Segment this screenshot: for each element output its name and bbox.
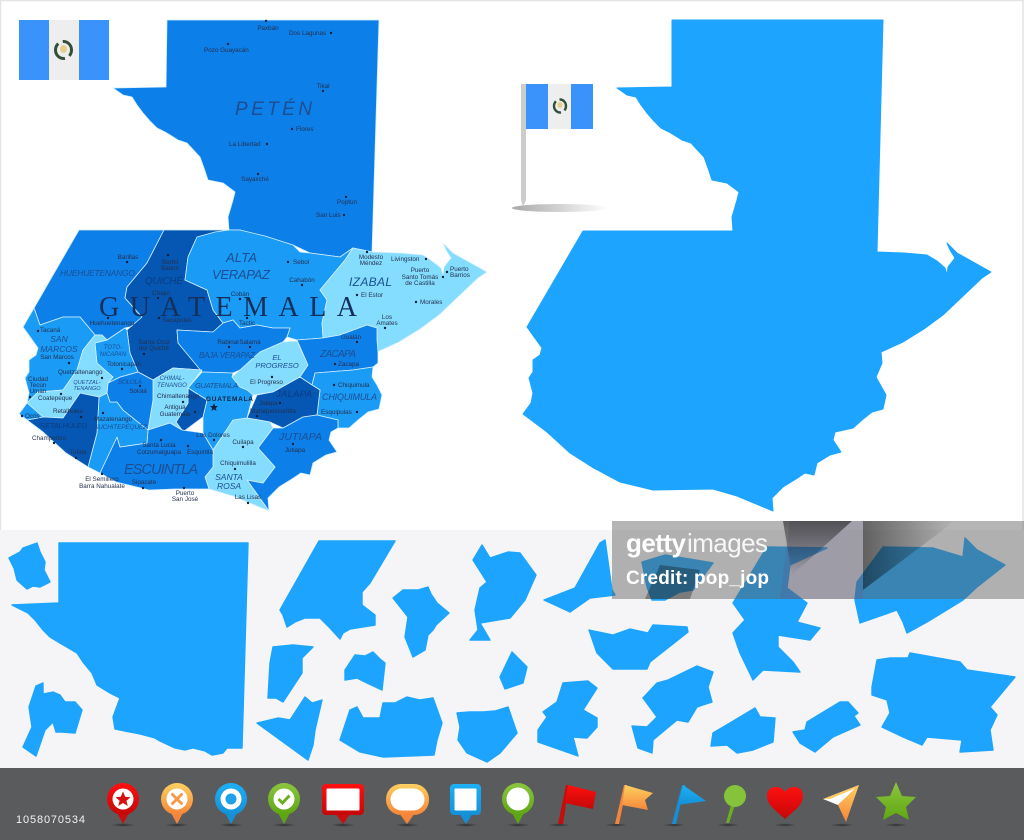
region: San Marcos	[23, 308, 95, 403]
city labels	[25, 25, 470, 503]
shape: Quiche	[470, 545, 536, 640]
city labels: Chimaltenango	[157, 393, 200, 400]
shape: Chimaltenango strip	[500, 652, 527, 689]
city labels: Los Dolores	[196, 432, 230, 439]
region: Izabal	[320, 243, 487, 352]
city labels: Sipacate	[132, 479, 157, 486]
city labels: Esquipulas	[321, 409, 352, 416]
icon: blue dot pin	[215, 783, 247, 827]
city dots	[21, 20, 448, 504]
city labels: San Marcos	[40, 354, 74, 361]
watermark text: getty	[626, 528, 687, 558]
region: Peten	[113, 20, 379, 257]
watermark text: images	[687, 528, 768, 558]
region: Solola	[107, 372, 153, 430]
region: Suchitepequez	[88, 393, 148, 473]
city labels: Gualán	[341, 334, 362, 341]
city labels: Chiquimula	[338, 382, 370, 389]
watermark text	[626, 528, 769, 589]
shape: Huehuetenango	[280, 541, 395, 639]
city labels: Tacaná	[40, 327, 61, 334]
shape: Retalhuleu	[23, 683, 82, 756]
department names: ROSA	[217, 481, 241, 491]
city labels: Tikal	[316, 83, 330, 90]
city labels: Tulate	[69, 449, 87, 456]
region: Baja Verapaz	[177, 320, 290, 373]
city labels: Salamá	[239, 339, 261, 346]
department names: MARCOS	[40, 344, 78, 354]
department names: EL	[272, 353, 282, 362]
city labels: Coatepeque	[38, 395, 73, 402]
city labels: Barbil	[162, 259, 178, 266]
city labels: Chajul	[152, 290, 170, 297]
city labels: La Libertad	[229, 141, 261, 148]
city labels: Santa Cruz	[138, 339, 170, 346]
shape: Chiquimula	[711, 708, 775, 753]
icon: green ring pin	[502, 783, 534, 827]
city labels: Flores	[296, 126, 314, 133]
image id: 1058070534	[16, 814, 85, 826]
shape: Jalapa	[538, 681, 597, 756]
map regions	[19, 20, 487, 511]
city labels: Mataquescuintla	[250, 408, 296, 415]
city labels: Chiquimulilla	[220, 460, 256, 467]
department names: SAN	[50, 334, 69, 344]
city labels: Dos Lagunas	[289, 30, 326, 37]
department names: GUATEMALA	[195, 381, 238, 390]
flag of Guatemala, top left	[19, 20, 109, 80]
region: Jutiapa	[247, 415, 338, 511]
icon: green check pin	[268, 783, 300, 827]
city labels: Champerico	[32, 435, 66, 442]
department names: CHIQUIMULA	[322, 392, 377, 402]
icon: red flag	[548, 785, 596, 827]
icon: orange rounded callout	[386, 784, 429, 827]
shape: Solola	[457, 707, 517, 762]
icon: orange navigation arrow	[823, 785, 859, 827]
shape: Escuintla	[340, 697, 442, 757]
region: Chiquimula	[312, 367, 382, 428]
region: Alta Verapaz	[185, 230, 353, 340]
city labels: Las Lisas	[235, 494, 261, 501]
city labels: Méndez	[360, 260, 382, 267]
region: Jalapa	[247, 377, 320, 428]
city labels: Barillas	[118, 254, 138, 261]
department names: BAJA VERAPAZ	[199, 351, 256, 360]
shape: Zacapa lower	[632, 666, 713, 753]
icon: blue flag	[663, 785, 706, 827]
region: Ocos coast	[19, 403, 43, 420]
department names: JALAPA	[275, 389, 312, 400]
city labels: El Progreso	[250, 379, 283, 386]
region: Zacapa	[297, 325, 378, 385]
city labels: Los	[382, 314, 392, 321]
region: Escuintla	[100, 423, 213, 490]
panel: regional map of Guatemala	[19, 20, 487, 511]
department names: ESCUINTLA	[124, 462, 198, 478]
shape: Jutiapa large	[872, 653, 1015, 752]
city labels: Jutiapa	[285, 447, 306, 454]
city labels: Poptún	[337, 199, 357, 206]
department names: JUTIAPA	[278, 431, 322, 443]
department names: TOTO-	[104, 345, 122, 351]
panel: dark icon bar	[0, 768, 1024, 840]
flag on pin	[512, 84, 608, 212]
city labels: Zacapa	[338, 361, 360, 368]
city labels: Livingston	[391, 256, 420, 263]
city labels: GUATEMALA	[206, 396, 253, 403]
city labels: Jalapa	[259, 400, 278, 407]
city labels: Guatemala	[160, 411, 191, 418]
region: Retalhuleu	[27, 393, 99, 467]
city labels: El Semillero	[85, 476, 119, 483]
city labels: Ocós	[25, 413, 40, 420]
city labels: Puerto	[411, 267, 430, 274]
department names: SUCHITEPÉQUEZ	[94, 422, 148, 431]
department names: ZACAPA	[319, 349, 356, 360]
shape: Izabal under watermark	[855, 538, 1005, 633]
department names: CHIMAL-	[160, 376, 184, 382]
city labels: Ciudad	[28, 376, 48, 383]
city labels: Quetzaltenango	[58, 369, 103, 376]
city labels: Sacapulas	[162, 317, 192, 324]
department names: QUETZAL-	[73, 380, 101, 386]
region: Sacatepequez	[176, 388, 207, 432]
city labels: Huehuetenango	[90, 320, 135, 327]
capital star marker	[210, 403, 218, 411]
region: Totonicapan	[95, 328, 138, 383]
city labels: El Estor	[361, 292, 383, 299]
department names: ALTA	[225, 250, 257, 265]
city labels: San José	[172, 496, 199, 503]
department names: HUEHUETENANGO	[60, 268, 135, 278]
department names: VERAPAZ	[212, 267, 271, 282]
city labels: Pozo Guayacán	[204, 47, 249, 54]
shape: Baja Verapaz lower	[589, 625, 688, 669]
region: Quiche	[125, 230, 229, 380]
map title: GUATEMALA	[99, 292, 358, 323]
city labels: Cahabón	[289, 277, 315, 284]
city labels: Modesto	[359, 254, 384, 261]
shape: Zacapa centre	[733, 547, 827, 680]
city labels: Tecún	[30, 382, 47, 389]
shape: Alta Verapaz under watermark	[544, 540, 615, 612]
city labels: Tactic	[239, 320, 255, 327]
department names: SOLOLÁ	[118, 377, 143, 386]
city labels: Umán	[30, 388, 47, 395]
icon: orange flag	[605, 785, 653, 827]
watermark	[612, 521, 1024, 599]
department names: TENANGO	[157, 383, 187, 389]
icon: orange cross pin	[161, 783, 193, 827]
icon: red rectangle callout	[322, 784, 364, 827]
panel: separated departments background	[0, 530, 1024, 768]
department names: IZABAL	[349, 275, 392, 289]
shape: Sacatepequez	[9, 543, 50, 589]
city labels: Paxbán	[257, 25, 279, 32]
shape: San Marcos	[393, 587, 449, 657]
city labels: Balam	[161, 265, 179, 272]
watermark text: Credit: pop_jop	[626, 568, 769, 589]
shape: Santa Rosa	[793, 702, 860, 752]
region: Chimaltenango	[148, 368, 202, 430]
frame edges	[0, 0, 1024, 530]
city labels: Sebol	[293, 259, 309, 266]
city labels: Sayaxché	[241, 176, 269, 183]
city labels: Barra Nahualate	[79, 483, 125, 490]
shape: Quetzaltenango	[268, 645, 313, 702]
department names: PETÉN	[235, 99, 312, 120]
panel: separated departments	[9, 538, 1015, 762]
department names: NICAPAN	[100, 352, 127, 358]
city labels: Esquintla	[187, 449, 213, 456]
department names	[40, 99, 392, 491]
city labels: Amates	[376, 320, 398, 327]
city labels: Totonicapán	[107, 361, 141, 368]
city labels: Santo Tomás	[402, 274, 438, 281]
city labels: Sololá	[129, 388, 147, 395]
department names: QUICHÉ	[145, 274, 183, 287]
department names: PROGRESO	[255, 361, 299, 370]
region: Guatemala department	[188, 372, 253, 450]
icon: red star pin	[107, 783, 139, 827]
city labels: Mazatenango	[94, 416, 133, 423]
region: El Progreso	[232, 341, 308, 395]
city labels: Morales	[420, 299, 442, 306]
department names: TENANGO	[73, 386, 101, 392]
icon: blue square callout	[450, 784, 481, 827]
shape: Peten	[12, 543, 248, 755]
city labels: Barrios	[450, 272, 470, 279]
shape: Totonicapan	[345, 652, 385, 690]
city labels: Cuilapa	[232, 439, 254, 446]
city labels: Antigua	[164, 404, 186, 411]
department names: SANTA	[215, 472, 243, 482]
region: Quetzaltenango	[27, 335, 113, 418]
department names: RETALHULEU	[40, 421, 88, 430]
icon: red heart	[767, 787, 803, 827]
city labels: Cotzumalguapa	[137, 449, 182, 456]
icon: green star	[876, 782, 916, 827]
city labels: Santa Lucia	[142, 442, 176, 449]
city labels: de Castilla	[405, 280, 435, 287]
city labels: Puerto	[450, 266, 469, 273]
shape: Suchitepequez	[257, 697, 322, 760]
city labels: del Quiché	[139, 345, 170, 352]
city labels: Rabinal	[217, 339, 239, 346]
city labels: Puerto	[176, 490, 195, 497]
city labels: San Luis	[316, 212, 341, 219]
shape: Baja Verapaz under watermark	[642, 555, 713, 600]
region: Santa Rosa	[205, 418, 275, 511]
panel: plain country silhouette	[523, 20, 991, 511]
region: Huehuetenango	[34, 230, 164, 340]
city labels: Cobán	[231, 291, 250, 298]
city labels: Retalhuleu	[53, 408, 84, 415]
icon: green pushpin	[717, 785, 746, 827]
